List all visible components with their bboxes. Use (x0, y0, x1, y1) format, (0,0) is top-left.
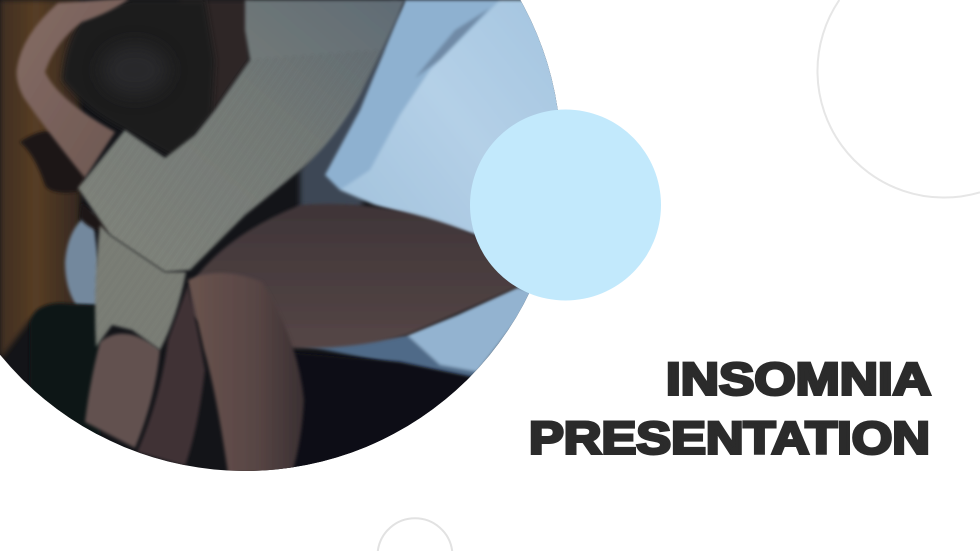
decorative ring top right (817, 0, 980, 198)
title line 2: PRESENTATION (529, 412, 930, 464)
circular photo: person sitting on bed (0, 0, 570, 480)
decorative ring bottom (378, 518, 452, 551)
wall (0, 0, 80, 360)
pale blue circle (470, 110, 661, 300)
left pillow (65, 212, 104, 305)
shin (188, 273, 304, 473)
knit ribbing (78, 50, 385, 272)
sweater body and sleeve (78, 0, 405, 272)
lower sleeve (95, 225, 186, 350)
title (529, 354, 931, 464)
neck shadow (202, 0, 250, 110)
title line 1: INSOMNIA (666, 354, 931, 404)
photo background (0, 0, 570, 480)
raised thigh (190, 204, 518, 348)
hair (20, 0, 215, 232)
hair highlight (104, 46, 166, 94)
dark bed base (28, 301, 102, 436)
dark band beside sweater (297, 11, 400, 206)
arm wrapped around head (17, 0, 130, 178)
near lower leg (85, 334, 160, 448)
far leg shadowed (137, 285, 205, 466)
bed sheet and pillow (300, 0, 570, 378)
sleeve ribbing (95, 225, 186, 350)
loose hair strands (20, 131, 85, 193)
